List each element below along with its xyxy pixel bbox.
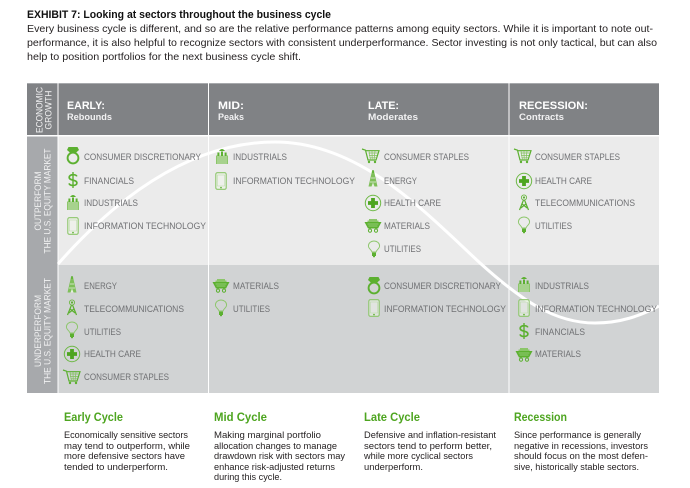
column: recession underperform xyxy=(516,277,657,361)
column: late outperform xyxy=(362,149,469,257)
sector: industrials: INDUSTRIALS xyxy=(84,198,138,208)
panel: outperform row background xyxy=(58,136,659,265)
sector: health care: HEALTH CARE xyxy=(84,349,141,359)
text block: early cycle xyxy=(64,410,190,472)
sector: materials: MATERIALS xyxy=(233,281,279,291)
text block: mid cycle: during this cycle. xyxy=(214,472,282,482)
intro text block xyxy=(27,24,657,63)
phase heading: early: Rebounds xyxy=(67,112,112,122)
sector: consumer staples: CONSUMER STAPLES xyxy=(535,152,620,162)
sector: industrials xyxy=(518,277,589,292)
business cycle curve xyxy=(58,142,659,323)
sector: telecommunications: TELECOMMUNICATIONS xyxy=(535,198,635,208)
sidebar: underperform xyxy=(27,265,58,393)
text block: mid cycle xyxy=(214,410,346,482)
sidebar label: economic growth: ECONOMIC xyxy=(34,86,44,133)
phase heading: early xyxy=(67,100,112,122)
sector: consumer staples: CONSUMER STAPLES xyxy=(384,152,469,162)
text block: late cycle: underperform. xyxy=(364,462,423,472)
sector: utilities: UTILITIES xyxy=(84,327,121,337)
text block: recession xyxy=(514,410,649,472)
sector: financials: FINANCIALS xyxy=(535,327,585,337)
sector: telecommunications: TELECOMMUNICATIONS xyxy=(84,304,184,314)
phase heading: recession: Contracts xyxy=(519,112,564,122)
sector: utilities: UTILITIES xyxy=(535,221,572,231)
sector: energy: ENERGY xyxy=(384,176,417,186)
sidebar: outperform: OUTPERFORM xyxy=(33,172,43,230)
sector: consumer staples: CONSUMER STAPLES xyxy=(84,372,169,382)
sector: utilities: UTILITIES xyxy=(233,304,270,314)
panel: underperform row background xyxy=(58,265,659,393)
text block: early cycle: tended to underperform. xyxy=(64,462,168,472)
text block: late cycle: Late Cycle xyxy=(364,410,420,424)
text block: mid cycle: enhance risk-adjusted returns xyxy=(214,462,336,472)
sector: health care: HEALTH CARE xyxy=(535,176,592,186)
text block: late cycle xyxy=(363,410,497,472)
sector: information technology: INFORMATION TECHNOLOGY xyxy=(84,221,206,231)
sector: information technology: INFORMATION TECHNOLOGY xyxy=(535,304,657,314)
intro text block: help to position portfolios for the next business cycle shift. xyxy=(27,52,301,63)
phase heading: recession: RECESSION: xyxy=(519,100,588,112)
column: mid outperform xyxy=(216,149,355,189)
intro text block: performance, it is also helpful to recognize sectors with consistent underperformance. Sector investing is not only tactical, but can also xyxy=(27,38,657,49)
text block: recession: sive, historically stable sectors. xyxy=(514,462,639,472)
text block: late cycle: Defensive and inflation-resistant xyxy=(364,430,497,440)
sidebar: outperform: THE U.S. EQUITY MARKET xyxy=(42,148,52,254)
text block: mid cycle: Mid Cycle xyxy=(214,410,267,424)
sector: energy: ENERGY xyxy=(84,281,117,291)
text block: early cycle: Early Cycle xyxy=(64,410,123,424)
phase heading: late: Moderates xyxy=(368,112,418,122)
text block: late cycle: while more cyclical sectors xyxy=(363,451,474,461)
text block: early cycle: may tend to outperform, while xyxy=(64,441,190,451)
text block: late cycle: sectors tend to perform better, xyxy=(364,441,492,451)
intro text block: Every business cycle is different, and so are the relative performance patterns among equity sectors. While it is important to note out- xyxy=(27,24,653,35)
header band: economic growth xyxy=(27,83,659,136)
sector: financials: FINANCIALS xyxy=(84,176,134,186)
text block: mid cycle: drawdown risk with sectors may xyxy=(214,451,346,461)
column: recession outperform xyxy=(514,149,635,233)
sector: consumer discretionary: CONSUMER DISCRETIONARY xyxy=(384,281,501,291)
sector: industrials: INDUSTRIALS xyxy=(233,152,287,162)
column: early outperform xyxy=(67,147,206,234)
sidebar: outperform xyxy=(27,136,58,265)
sidebar: underperform: UNDERPERFORM xyxy=(33,295,43,367)
sector: information technology: INFORMATION TECHNOLOGY xyxy=(233,176,355,186)
text block: mid cycle: Making marginal portfolio xyxy=(214,430,321,440)
sector: consumer discretionary: CONSUMER DISCRETIONARY xyxy=(84,152,201,162)
phase heading: mid xyxy=(218,100,244,122)
sector: materials xyxy=(516,348,581,361)
sector: information technology xyxy=(519,300,657,316)
text block: early cycle: more defensive sectors have xyxy=(64,451,185,461)
text block: early cycle: Economically sensitive sectors xyxy=(64,430,189,440)
sidebar: underperform: THE U.S. EQUITY MARKET xyxy=(42,277,52,384)
sector: utilities: UTILITIES xyxy=(384,244,421,254)
sidebar label: economic growth xyxy=(34,86,54,133)
phase heading: mid: MID: xyxy=(218,100,244,112)
sector: financials xyxy=(520,323,585,339)
text block: mid cycle: allocation changes to manage xyxy=(214,441,337,451)
sector: materials: MATERIALS xyxy=(535,349,581,359)
phase heading: early: EARLY: xyxy=(67,100,105,112)
text block: recession: should focus on the most defen- xyxy=(514,451,648,461)
phase heading: mid: Peaks xyxy=(218,112,244,122)
phase heading: late xyxy=(368,100,418,122)
text block: recession: negative in recessions, investors xyxy=(514,441,649,451)
sector: industrials: INDUSTRIALS xyxy=(535,281,589,291)
sector: health care: HEALTH CARE xyxy=(384,198,441,208)
sector: information technology: INFORMATION TECHNOLOGY xyxy=(384,304,506,314)
text block: recession: Since performance is generally xyxy=(514,430,642,440)
column: early underperform xyxy=(63,276,184,384)
text block: recession: Recession xyxy=(514,410,567,424)
sidebar label: economic growth: GROWTH xyxy=(44,90,54,130)
phase heading: recession xyxy=(519,100,588,122)
column: late underperform xyxy=(368,277,506,316)
column: mid underperform xyxy=(212,279,279,316)
sector: materials: MATERIALS xyxy=(384,221,430,231)
phase heading: late: LATE: xyxy=(368,100,399,112)
title: EXHIBIT 7: Looking at sectors throughout the business cycle xyxy=(27,9,331,21)
